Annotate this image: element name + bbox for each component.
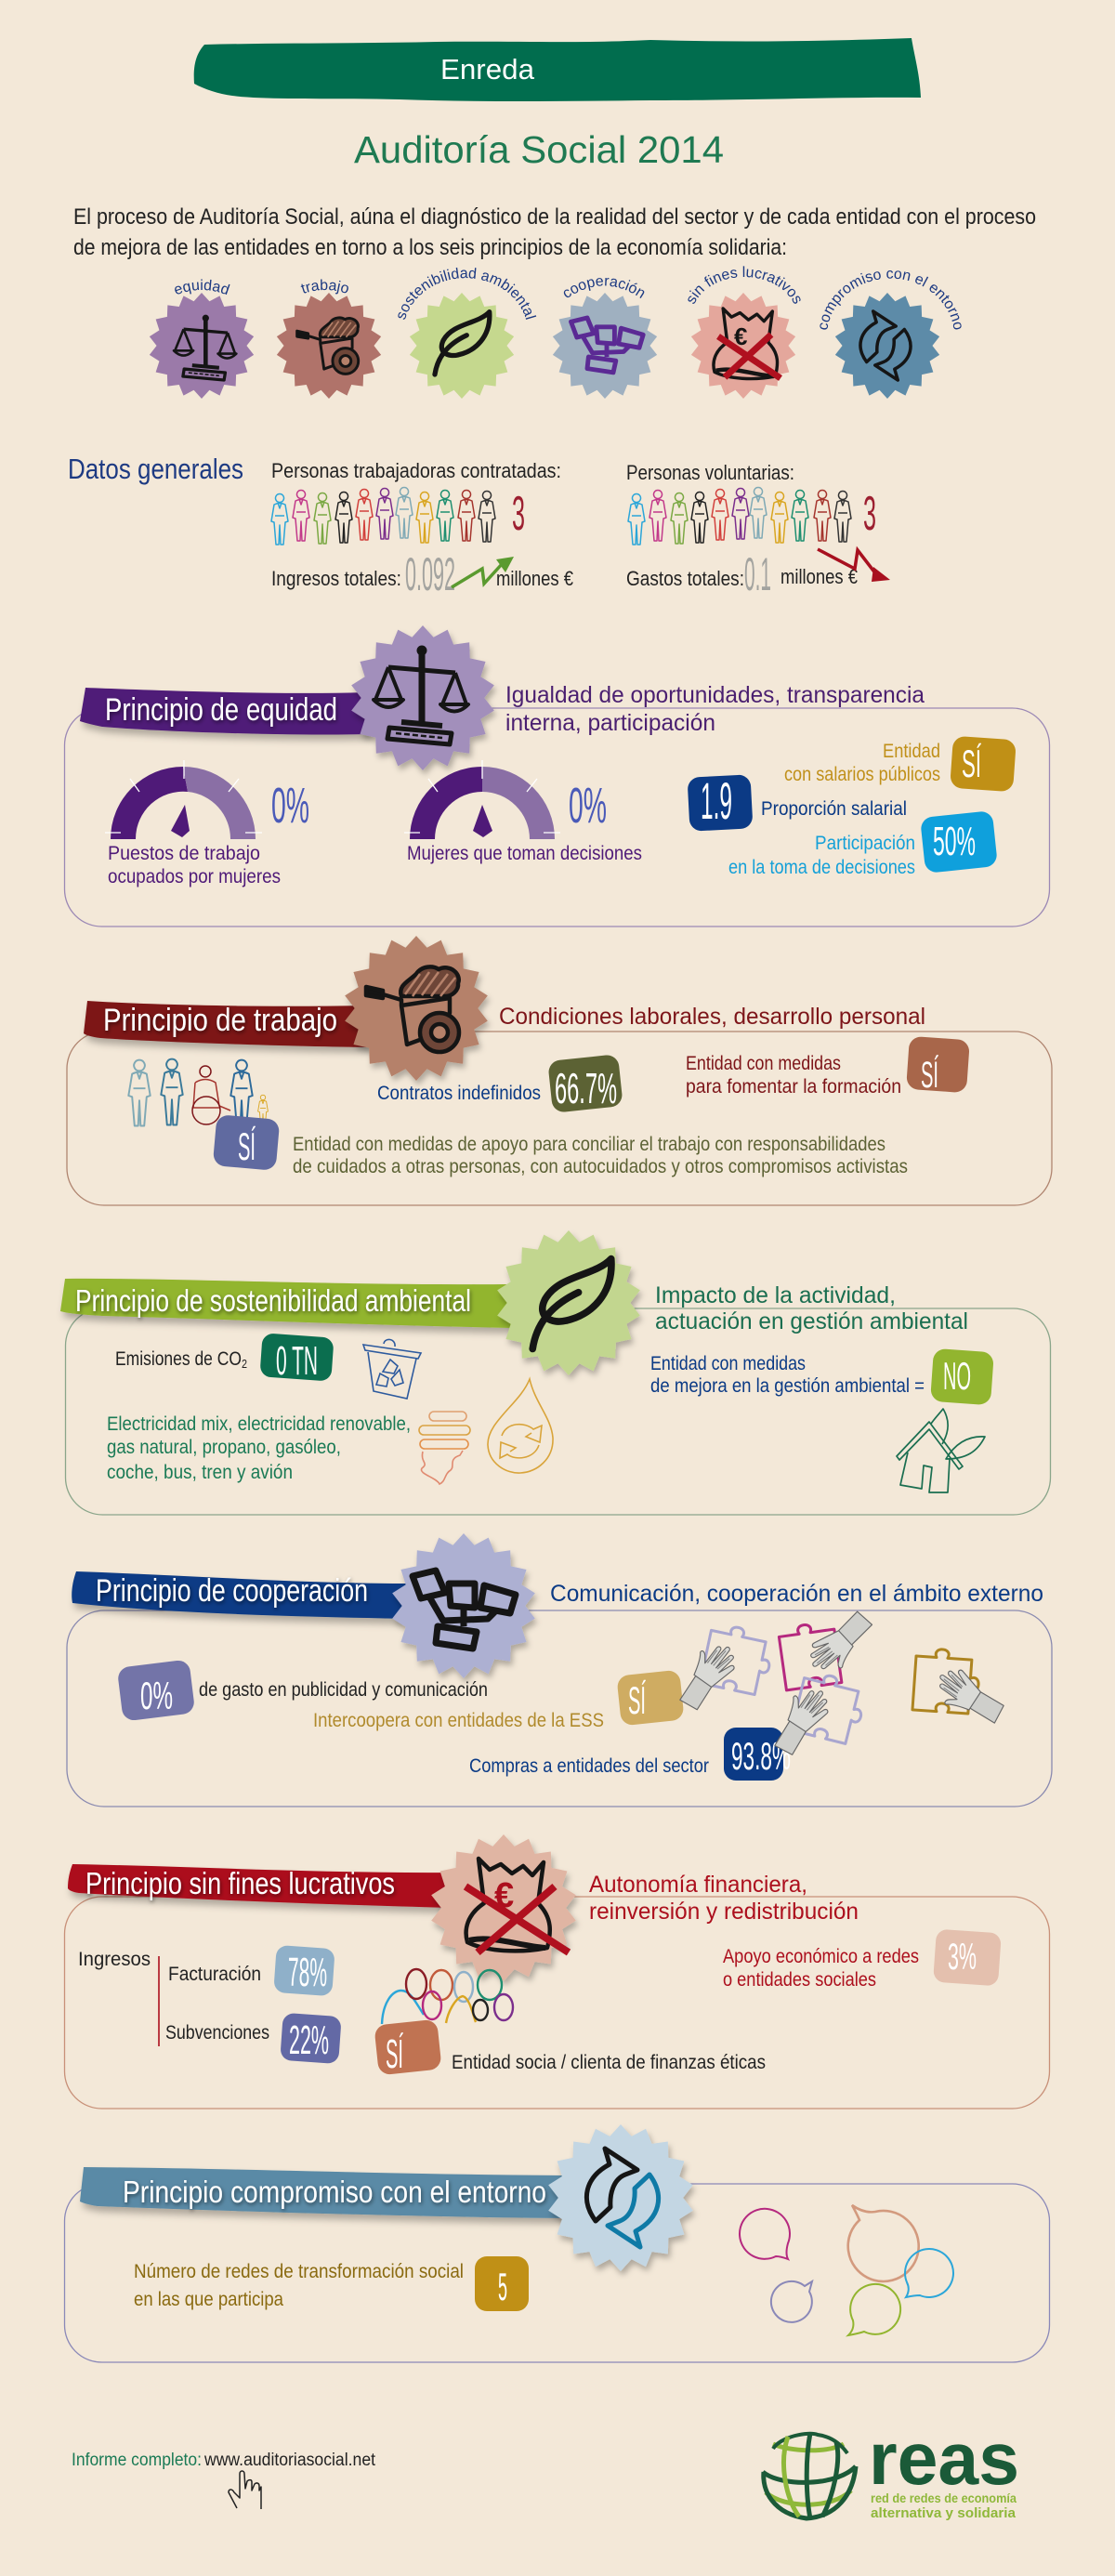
badge icon: scales [351, 625, 494, 770]
callout: redes: Número de redes de transformación social [134, 2261, 464, 2282]
subtitle: actuación en gestión ambiental [655, 1308, 968, 1334]
callout: conciliar: de cuidados a otras personas, con autocuidados y otros compromisos activistas [293, 1156, 908, 1177]
callout: intercoopera [313, 1670, 685, 1731]
banner: Principio de equidad [105, 692, 337, 728]
panel outline [65, 1308, 1050, 1515]
callout: formación: Entidad con medidas [686, 1053, 841, 1074]
section: principio de cooperación [67, 1533, 1052, 1807]
subtitle: Autonomía financiera, [589, 1872, 807, 1898]
logo globe [763, 2433, 856, 2518]
callout: salarios públicos [784, 736, 1017, 792]
text: fuentes de energía: gas natural, propano, gasóleo, [107, 1437, 341, 1458]
callout: apoyo económico: 3% [948, 1937, 977, 1978]
callout: gestión ambiental [650, 1348, 994, 1405]
emisiones de CO2 [115, 1333, 334, 1384]
badge: trabajo [277, 279, 381, 399]
callout: publicidad: 0% [140, 1674, 173, 1717]
gastos totales: 0.1 [744, 548, 771, 600]
badge: sin fines lucrativos: sin fines lucrativos [688, 266, 801, 304]
badge icon: leaf [497, 1230, 640, 1375]
ingresos breakdown: Subvenciones [165, 2022, 269, 2044]
callout: gestión ambiental: NO [943, 1354, 971, 1398]
badge icon: money bag crossed out [431, 1834, 576, 1981]
ingresos breakdown [78, 1945, 342, 2064]
callout: proporción salarial: Proporción salarial [761, 798, 907, 820]
logo tagline [871, 2491, 1017, 2521]
callout: salarios públicos: Entidad [883, 741, 940, 762]
panel outline [65, 1897, 1050, 2109]
footer link [72, 2451, 376, 2470]
callout: formación: SÍ [921, 1054, 938, 1096]
callout: apoyo económico: Apoyo económico a redes [723, 1946, 919, 1967]
panel outline [67, 1032, 1052, 1205]
subtitle: Comunicación, cooperación en el ámbito externo [550, 1581, 1043, 1607]
illustration: speech bubbles [740, 2205, 953, 2335]
icon: recycling bin [363, 1339, 421, 1399]
logo tagline: red de redes de economía [871, 2491, 1017, 2505]
subtitle: Igualdad de oportunidades, transparencia [505, 682, 925, 708]
banner [60, 1279, 512, 1328]
banner: Principio sin fines lucrativos [85, 1866, 395, 1900]
badge: sin fines lucrativos [688, 266, 801, 399]
datos generales: 3 [863, 487, 876, 541]
gauge: puestos de trabajo: 0% [271, 778, 309, 834]
emisiones de CO2: 0 TN [276, 1338, 318, 1384]
icon: water drop [488, 1379, 553, 1473]
text: fuentes de energía: coche, bus, tren y avión [107, 1462, 293, 1483]
banner: Principio compromiso con el entorno [123, 2175, 546, 2209]
logo: reas [763, 2417, 1019, 2521]
subtitle [505, 682, 925, 736]
illustration: crowd [382, 1969, 513, 2024]
footer link: Informe completo: [72, 2451, 202, 2470]
badge icon: money bag crossed out: € [494, 1876, 514, 1915]
subtitle: reinversión y redistribución [589, 1899, 859, 1925]
text: fuentes de energía: Electricidad mix, electricidad renovable, [107, 1413, 411, 1435]
callout: compras: 93.8% [731, 1734, 791, 1778]
gauge: puestos de trabajo: Puestos de trabajo [108, 843, 260, 864]
badge: equidad: equidad [175, 279, 230, 296]
ingresos breakdown: Ingresos [78, 1949, 151, 1970]
callout: apoyo económico [723, 1929, 1002, 1991]
callout: finanzas éticas: SÍ [386, 2031, 403, 2077]
callout: redes: en las que participa [134, 2289, 283, 2310]
illustration: people [128, 1059, 268, 1126]
callout: formación: para fomentar la formación [686, 1076, 901, 1097]
callout: salarios públicos: con salarios públicos [784, 764, 940, 785]
section: principio compromiso con el entorno [65, 2124, 1050, 2362]
icon: light bulb [419, 1412, 470, 1484]
badge icon: network [392, 1533, 535, 1678]
icon: pointing hand [229, 2471, 261, 2509]
callout: redes: 5 [498, 2265, 507, 2308]
ingresos breakdown: Facturación [168, 1964, 261, 1985]
logo wordmark: reas [869, 2417, 1019, 2500]
gauge: mujeres que toman decisiones [404, 760, 642, 864]
datos generales [68, 453, 890, 600]
callout: proporción salarial: 1.9 [701, 771, 732, 830]
ingresos breakdown: 78% [288, 1950, 327, 1995]
panel outline [67, 1610, 1052, 1807]
ingresos totales [271, 548, 573, 600]
subtitle [655, 1282, 968, 1334]
footer link: www.auditoriasocial.net [203, 2451, 376, 2470]
gastos totales: Gastos totales: [626, 567, 744, 590]
emisiones de CO2: 2 [242, 1357, 247, 1371]
badge: sostenibilidad ambiental [398, 268, 537, 399]
text: fuentes de energía [107, 1413, 411, 1483]
personas voluntarias [626, 461, 876, 545]
gauge: puestos de trabajo: ocupados por mujeres [108, 866, 281, 887]
ingresos breakdown: 22% [289, 2017, 329, 2063]
callout: participación: 50% [933, 819, 976, 864]
callout: gestión ambiental: de mejora en la gestión ambiental = [650, 1375, 925, 1397]
callout: gestión ambiental: Entidad con medidas [650, 1353, 806, 1374]
callout: proporción salarial [688, 771, 907, 832]
intro text [73, 204, 1036, 260]
callout: redes [134, 2256, 529, 2311]
section: principio sin fines lucrativos [65, 1834, 1050, 2109]
callout: conciliar: SÍ [238, 1124, 256, 1168]
callout: intercoopera: Intercoopera con entidades de la ESS [313, 1710, 604, 1731]
gastos totales [626, 548, 890, 600]
title: Auditoría Social 2014 [354, 128, 724, 171]
callout: participación: en la toma de decisiones [728, 857, 915, 878]
section: principio de equidad [65, 625, 1050, 927]
callout: contratos indefinidos: Contratos indefinidos [377, 1083, 541, 1104]
personas trabajadoras [271, 459, 561, 545]
callout: intercoopera: SÍ [628, 1678, 646, 1722]
intro text: de mejora de las entidades en torno a los seis principios de la economía solidaria: [73, 235, 787, 260]
panel outline [65, 708, 1050, 927]
ingresos totales: millones € [496, 567, 573, 590]
ingresos totales: Ingresos totales: [271, 567, 401, 590]
personas voluntarias: Personas voluntarias: [626, 461, 794, 484]
callout: compras: Compras a entidades del sector [469, 1755, 709, 1777]
gauge: mujeres que toman decisiones: Mujeres que toman decisiones [407, 843, 642, 864]
callout: publicidad [117, 1659, 488, 1722]
callout: apoyo económico: o entidades sociales [723, 1969, 876, 1991]
callout: participación: Participación [815, 833, 915, 854]
section: principio de trabajo [67, 936, 1052, 1205]
personas trabajadoras: Personas trabajadoras contratadas: [271, 459, 561, 482]
section: principio de sostenibilidad ambiental [60, 1230, 1050, 1515]
banner [72, 1571, 411, 1619]
callout: finanzas éticas [374, 2019, 766, 2077]
badge: cooperación: cooperación [563, 278, 645, 298]
personas trabajadoras: 3 [512, 487, 525, 541]
subtitle: interna, participación [505, 710, 715, 736]
six principle badges [149, 266, 962, 399]
gauge: mujeres que toman decisiones: 0% [569, 778, 607, 834]
gauge: puestos de trabajo [105, 760, 309, 887]
logo tagline: alternativa y solidaria [871, 2505, 1017, 2521]
banner: Principio de sostenibilidad ambiental [75, 1283, 471, 1318]
banner: Principio de trabajo [103, 1003, 337, 1038]
subtitle [589, 1872, 859, 1925]
panel outline [65, 2184, 1050, 2362]
heading: datos generales: Datos generales [68, 453, 243, 485]
gastos totales: millones € [780, 565, 858, 588]
top banner: Enreda [194, 38, 921, 101]
callout: contratos indefinidos: 66.7% [555, 1064, 617, 1112]
callout: participación [728, 810, 998, 878]
callout: contratos indefinidos [377, 1054, 623, 1113]
banner [80, 2167, 569, 2218]
badge: cooperación [553, 278, 657, 399]
illustration: puzzle pieces and hands [668, 1608, 1007, 1758]
icon: eco house [897, 1409, 985, 1492]
banner: Principio de cooperación [96, 1573, 368, 1609]
callout: conciliar: Entidad con medidas de apoyo para conciliar el trabajo con responsabilidades [293, 1134, 885, 1155]
badge: compromiso con el entorno [820, 270, 962, 399]
callout: salarios públicos: SÍ [962, 742, 981, 785]
emisiones de CO2: Emisiones de CO [115, 1348, 267, 1370]
callout: publicidad: de gasto en publicidad y comunicación [199, 1679, 488, 1701]
top banner: Enreda: Enreda [440, 53, 535, 85]
badge icon: arrows [548, 2124, 693, 2271]
callout: formación [686, 1036, 970, 1097]
badge: trabajo: trabajo [301, 279, 348, 294]
ingresos totales: 0.092 [405, 548, 455, 600]
callout: compras [469, 1728, 791, 1781]
badge: sostenibilidad ambiental: sostenibilidad ambiental [398, 268, 537, 320]
badge icon: wheelbarrow [345, 936, 488, 1081]
badge: sin fines lucrativos: € [734, 322, 747, 350]
badge: compromiso con el entorno: compromiso con el entorno [820, 270, 962, 330]
subtitle: Condiciones laborales, desarrollo personal [499, 1004, 925, 1030]
banner [80, 688, 370, 735]
callout: finanzas éticas: Entidad socia / clienta de finanzas éticas [452, 2052, 766, 2073]
badge: equidad [149, 279, 255, 399]
subtitle: Impacto de la actividad, [655, 1282, 896, 1308]
callout: conciliar [213, 1114, 908, 1177]
